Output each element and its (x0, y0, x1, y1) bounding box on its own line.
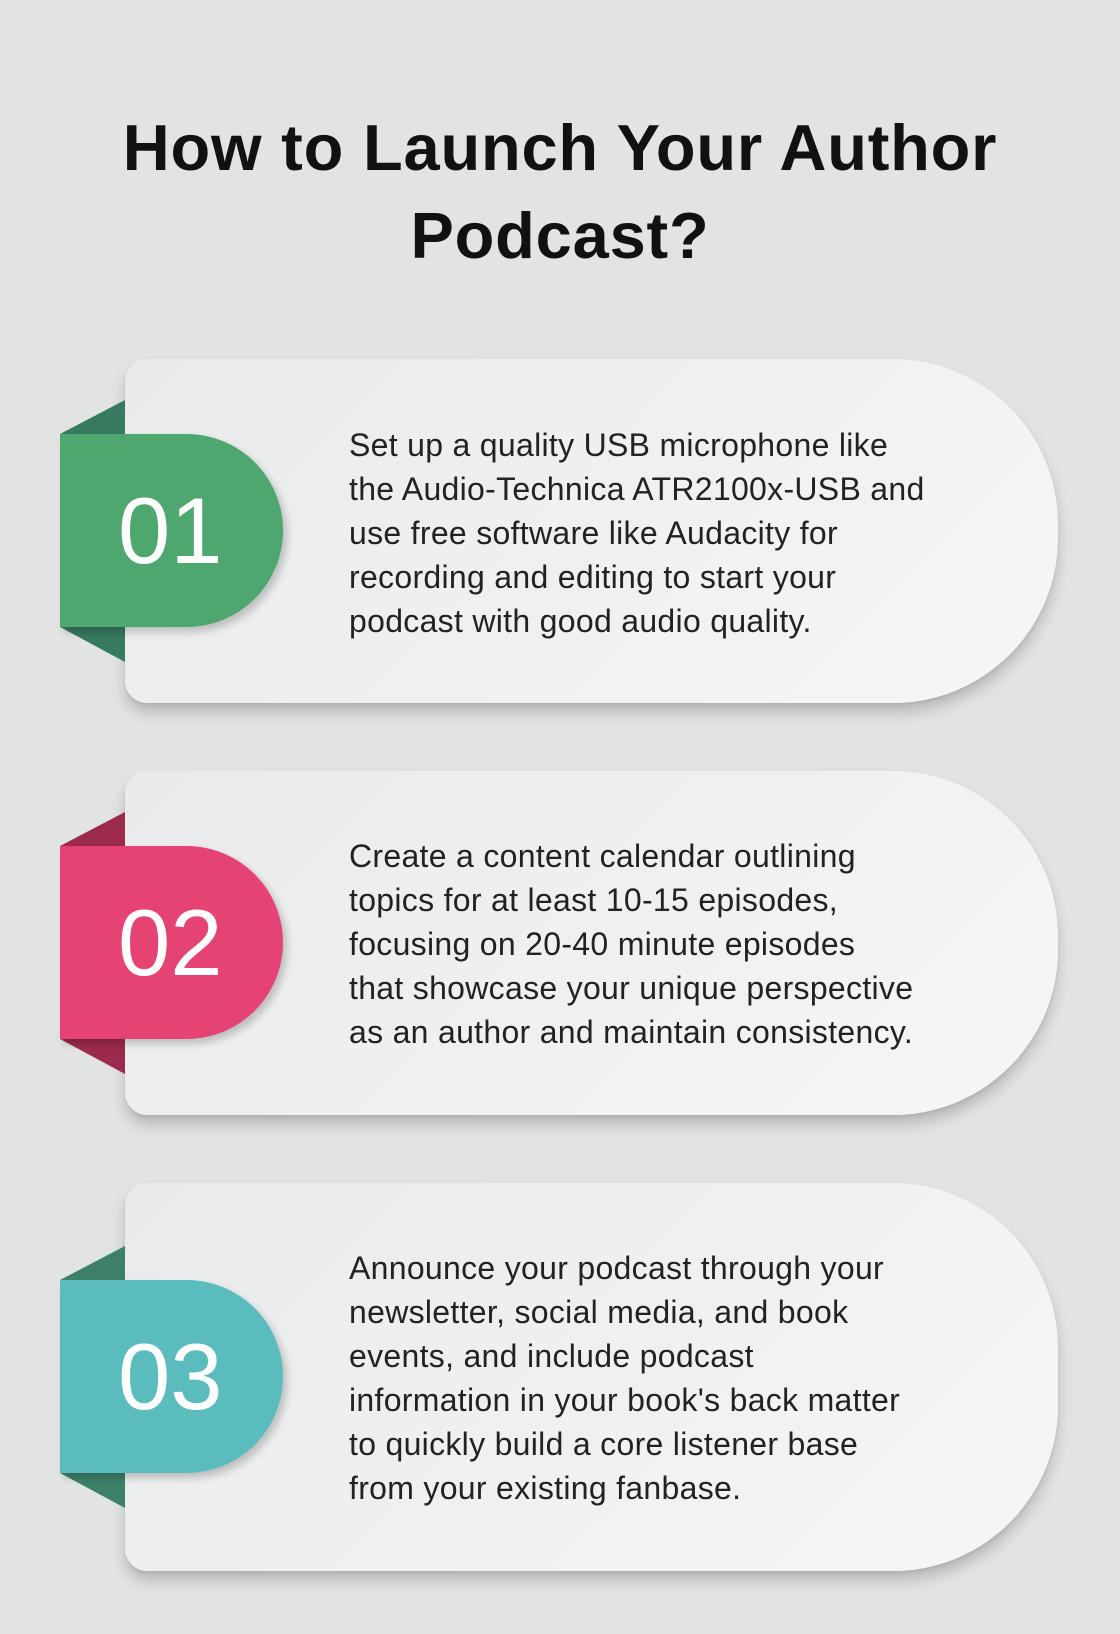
text 1 (349, 427, 925, 639)
text 2: that showcase your unique perspective (349, 970, 913, 1006)
text 1: podcast with good audio quality. (349, 603, 812, 639)
badge 03: 03 (118, 1324, 223, 1429)
text 2: topics for at least 10-15 episodes, (349, 882, 838, 918)
card 1 (125, 359, 1058, 703)
panel: step 1 (60, 359, 1064, 718)
text 1: use free software like Audacity for (349, 515, 838, 551)
text 3: Announce your podcast through your (349, 1250, 884, 1286)
text 2: focusing on 20-40 minute episodes (349, 926, 855, 962)
text 3 (349, 1250, 900, 1506)
badge 01 (60, 434, 283, 627)
card 3 (125, 1183, 1058, 1571)
badge 01: 01 (118, 478, 223, 583)
text 3: from your existing fanbase. (349, 1470, 741, 1506)
badge 02: 02 (118, 890, 223, 995)
text 1: the Audio-Technica ATR2100x-USB and (349, 471, 925, 507)
text 2: Create a content calendar outlining (349, 838, 856, 874)
fold 2 (60, 812, 125, 1074)
panel: step 3 (60, 1183, 1064, 1586)
card 2 (125, 771, 1058, 1115)
text 2: as an author and maintain consistency. (349, 1014, 913, 1050)
text 3: events, and include podcast (349, 1338, 754, 1374)
title: Podcast? (411, 199, 709, 272)
text 3: to quickly build a core listener base (349, 1426, 858, 1462)
badge 03 (60, 1280, 283, 1473)
text 3: newsletter, social media, and book (349, 1294, 848, 1330)
fold 3 (60, 1246, 125, 1508)
fold 1 (60, 400, 125, 662)
text 1: recording and editing to start your (349, 559, 836, 595)
panel: step 2 (60, 771, 1064, 1130)
title (123, 111, 997, 272)
text 2 (349, 838, 913, 1050)
text 1: Set up a quality USB microphone like (349, 427, 888, 463)
badge 02 (60, 846, 283, 1039)
title: How to Launch Your Author (123, 111, 997, 184)
text 3: information in your book's back matter (349, 1382, 900, 1418)
